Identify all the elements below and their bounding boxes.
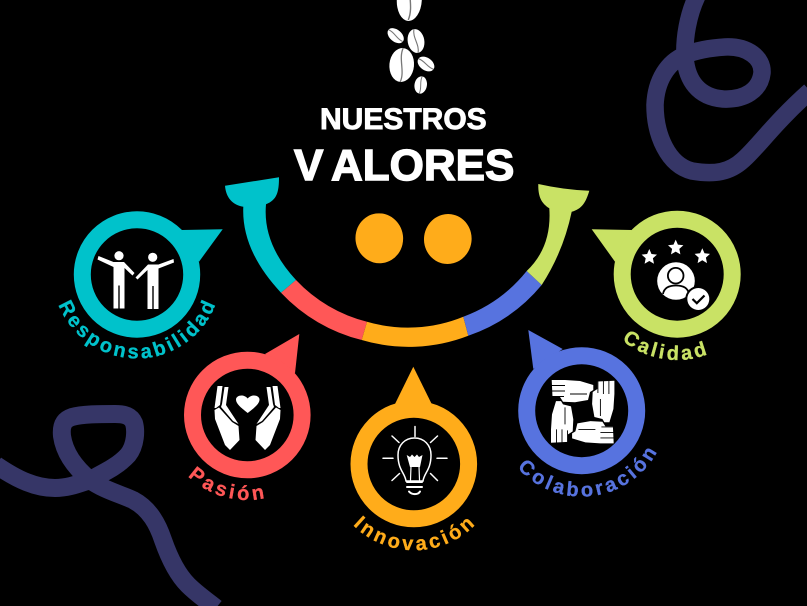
title line: Valores: ALORES: [331, 141, 514, 190]
ring: [622, 219, 732, 329]
label: Innovación: [354, 516, 474, 550]
label: Colaboración: [520, 448, 657, 497]
label: Pasión: [188, 466, 264, 500]
central smile arc: [225, 177, 589, 347]
decorative squiggle: top right: [655, 0, 807, 173]
arc segment: lime: [527, 184, 589, 285]
pointer: [265, 334, 299, 373]
eyes: [352, 210, 475, 267]
label: Calidad: [624, 332, 707, 360]
icon: bulb filament: [407, 454, 422, 467]
stars: [642, 240, 710, 264]
icon: bean small left: [385, 25, 407, 46]
panel: Innovación: [350, 366, 478, 550]
pointer: [592, 229, 632, 262]
pointer: [528, 330, 563, 369]
eye left: [352, 210, 406, 266]
check badge: [685, 286, 711, 312]
ring: [192, 360, 302, 470]
icon: bean top: [396, 0, 423, 22]
icon: two people holding hands: [98, 251, 174, 309]
pointer: [395, 367, 432, 404]
panel: Calidad: [592, 210, 741, 360]
title: [294, 103, 514, 190]
icon: four linked hands: [551, 380, 614, 443]
ring: [359, 409, 469, 519]
ring: [527, 356, 637, 466]
icon: hands with heart: [214, 386, 280, 450]
title line: Valores: V: [294, 141, 323, 190]
eye right: [421, 211, 475, 267]
arc segment: blue: [463, 271, 542, 336]
title line: Nuestros: NUESTROS: [320, 103, 487, 136]
icon: falling coffee beans: [385, 0, 437, 95]
icon: bean middle: [406, 28, 426, 54]
ring: [82, 220, 192, 329]
panel: Colaboración: [518, 330, 657, 497]
icon: light bulb: [383, 426, 447, 494]
arc segment: red: [281, 280, 367, 340]
decorative squiggle: bottom left: [0, 414, 216, 606]
user badge: [657, 262, 695, 300]
pointer: [182, 229, 223, 262]
icon: bean right: [415, 54, 437, 74]
arc segment: teal: [225, 177, 296, 293]
icon: bean large: [388, 47, 415, 83]
panel: Pasión: [184, 334, 311, 500]
icon: bean bottom: [413, 75, 428, 95]
panel: Responsabilidad: [58, 211, 223, 359]
label: Responsabilidad: [58, 300, 216, 359]
icon: rated user with stars: [642, 240, 711, 312]
arc segment: orange: [362, 317, 468, 347]
